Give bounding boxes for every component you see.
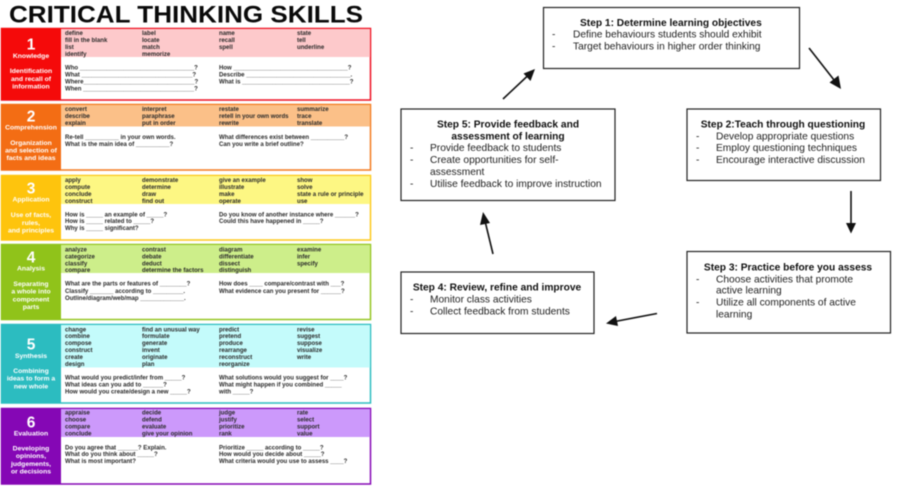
panel: 5 synthesis: revise [297,328,315,334]
panel: 4 analysis: debate [142,254,162,260]
step 2 box [687,109,880,180]
panel: 5 synthesis: formulate [142,334,170,340]
panel: 6 evaluation: judge [218,410,236,416]
panel: 4 analysis: categorize [65,254,96,260]
panel: 1 knowledge: and recall of [11,76,52,83]
panel: 1 knowledge: Who __________________________________? [65,66,198,72]
panel: 1 knowledge: underline [297,45,325,51]
step 3 box [687,252,890,333]
step 5 box: assessment [430,167,485,178]
panel: 6 evaluation: or decisions [11,468,51,476]
step 2 box: Employ questioning techniques [716,143,857,154]
panel: 3 application: draw [142,192,156,198]
panel: 4 analysis: contrast [142,248,166,254]
panel: 4 analysis: differentiate [219,254,254,260]
panel: 2 comprehension: summarize [297,107,329,113]
step 5 box: - [410,155,413,166]
step 2 box: Develop appropriate questions [716,132,854,142]
panel: 4 analysis: a whole into [11,288,51,296]
panel: 1 knowledge: match [142,45,160,51]
panel: 4 analysis: infer [297,254,311,260]
step 3 box: Utilize all components of active [716,298,856,308]
step 1 box: - [552,30,555,40]
panel: 4 analysis: determine the factors [142,268,204,274]
panel: 3 application: How is _____ an example of _____? [65,212,167,218]
panel: 2 comprehension: facts and ideas [6,155,56,162]
panel: 5 synthesis: rearrange [219,348,248,354]
panel: 4 analysis: Separating [13,281,49,288]
panel: 3 application: solve [297,185,313,191]
panel: 2 comprehension: restate [219,107,239,113]
panel: 1 knowledge: Identification [10,68,52,75]
panel: 2 comprehension: 2 [27,108,35,126]
panel: 6 evaluation: compare [65,424,91,430]
panel: 3 application: Do you know of another instance where ______? [219,212,359,218]
panel: 1 knowledge: 1 [27,36,36,54]
panel: 6 evaluation [1,408,370,484]
panel: 5 synthesis: Combining [13,368,49,375]
step 5 box: Step 5: Provide feedback and [437,120,579,130]
step 1 box [544,8,800,68]
panel: 2 comprehension: put in order [142,121,176,127]
arrow: step 2 to step 3 [846,191,856,234]
panel: 4 analysis [1,244,370,320]
step 5 box: Utilise feedback to improve instruction [430,179,602,190]
panel: 2 comprehension: trace [297,114,312,120]
panel: 1 knowledge: define [65,31,83,37]
step 3 box: Choose activities that promote [716,274,853,286]
panel: 3 application: rules, [22,220,40,227]
panel: 3 application: use [297,199,308,205]
panel: 5 synthesis: originate [142,355,168,361]
panel: 2 comprehension: and selection of [5,148,58,154]
step 3 box: Step 3: Practice before you assess [704,262,872,274]
panel: 3 application: How is _____ related to _____? [65,219,154,225]
panel: 1 knowledge: What is ________________________________? [219,80,354,86]
panel: 4 analysis: analyze [65,248,87,254]
panel: 6 evaluation: What criteria would you use to assess ____? [219,459,348,465]
panel: 5 synthesis: What solutions would you suggest for ____? [219,376,348,382]
arrow: step 1 to step 2 [809,48,841,89]
panel: 6 evaluation: appraise [65,410,91,416]
panel: 5 synthesis: invent [142,348,160,354]
panel: 2 comprehension: paraphrase [142,114,175,120]
step 4 box: - [410,294,413,306]
panel: 3 application: Application [12,196,50,204]
panel: 3 application: and principles [8,228,54,234]
arrow: step 3 to step 4 [606,314,657,326]
panel: 5 synthesis: write [296,355,312,361]
panel: 3 application: give an example [219,178,266,184]
panel: 1 knowledge: Describe _______________________________. [219,72,352,78]
panel: 1 knowledge: identify [65,52,87,58]
panel: 5 synthesis: ideas to form a [7,376,55,382]
panel: 3 application: demonstrate [142,178,179,184]
step 1 box: Step 1: Determine learning objectives [580,18,762,29]
panel: 1 knowledge: fill in the blank [65,38,108,44]
step 4 box: - [410,306,413,318]
panel: 6 evaluation: choose [65,418,87,424]
panel: 4 analysis: diagram [219,248,243,254]
panel: 6 evaluation: How would you decide about _____? [219,452,325,458]
panel: 6 evaluation: 6 [27,414,36,432]
panel: 2 comprehension: What is the main idea of __________? [65,142,174,148]
panel: 3 application: compute [65,185,91,191]
step 1 box: Target behaviours in higher order thinking [573,42,761,52]
step 2 box: Encourage interactive discussion [716,155,865,166]
panel: 4 analysis: distinguish [219,268,252,274]
panel: 5 synthesis: new whole [14,384,48,390]
step 5 box: assessment of learning [451,132,565,142]
panel: 4 analysis: specify [297,262,318,268]
panel: 4 analysis: What evidence can you present for ______? [219,289,345,295]
panel: 6 evaluation: What is most important? [65,459,136,465]
panel: 6 evaluation: evaluate [142,424,167,430]
panel: 3 application: operate [219,199,241,205]
step 4 box: Step 4: Review, refine and improve [413,282,581,294]
panel: 6 evaluation: support [297,424,320,430]
panel: 4 analysis: parts [23,304,40,311]
step 3 box: learning [716,310,753,320]
step 4 box [401,272,594,334]
panel: 5 synthesis: visualize [297,348,323,354]
panel: 4 analysis: examine [297,248,322,254]
panel: 4 analysis: deduct [142,262,162,268]
panel: 3 application: show [297,178,313,184]
panel: 1 knowledge: tell [297,38,306,44]
panel: 6 evaluation: decide [142,410,162,416]
panel: 6 evaluation: Prioritize _____ according to _____? [219,446,324,452]
panel: 1 knowledge: label [142,31,156,37]
panel: 3 application: conclude [65,192,92,198]
panel: 4 analysis: What are the parts or features of ________? [65,282,191,288]
panel: 5 synthesis: create [65,355,83,361]
panel: 2 comprehension: describe [65,114,91,120]
panel: 3 application: find out [142,199,164,205]
panel: 4 analysis: compare [65,268,91,274]
panel: 3 application: Use of facts, [11,212,51,219]
panel: 2 comprehension: Can you write a brief outline? [219,142,304,148]
arrow: step 4 to step 5 [480,212,493,254]
panel: 5 synthesis: change [65,328,87,334]
step 1 box: Define behaviours students should exhibit [573,30,762,40]
panel: 2 comprehension [1,104,370,170]
panel: 1 knowledge: locate [142,38,160,44]
panel: 4 analysis: Classify _______ according to _________. [65,289,185,295]
step 5 box: Provide feedback to students [430,143,561,154]
step 4 box: Collect feedback from students [430,306,570,318]
panel: 1 knowledge: spell [219,45,233,51]
panel: 2 comprehension: convert [65,107,87,113]
panel: 6 evaluation: opinions, [16,453,46,460]
panel: 3 application [1,175,370,240]
panel: 2 comprehension: interpret [142,107,167,113]
panel: 6 evaluation: value [297,432,313,438]
panel: 6 evaluation: Do you agree that ______? Explain. [65,446,167,452]
panel: 6 evaluation: give your opinion [142,432,193,438]
panel: 3 application: state a rule or principle [297,192,364,198]
panel: 6 evaluation: defend [142,418,162,424]
panel: 5 synthesis: combine [65,334,91,340]
panel: 5 synthesis: Synthesis [15,353,47,360]
panel: 6 evaluation: rate [297,410,309,416]
panel: 5 synthesis: suggest [297,334,320,340]
panel: 2 comprehension: Re-tell __________ in your own words. [65,135,176,141]
panel: 5 synthesis: suppose [297,341,323,347]
panel: 2 comprehension: retell in your own words [219,114,289,120]
panel: 3 application: illustrate [219,185,245,191]
panel: 5 synthesis: plan [142,362,155,368]
panel: 1 knowledge: Where_________________________________? [65,80,198,86]
arrow: step 5 to step 1 [503,69,535,99]
panel: 1 knowledge: How __________________________________? [219,66,352,72]
panel: 4 analysis: 4 [27,250,36,266]
panel: 2 comprehension: rewrite [219,121,239,127]
panel: 6 evaluation: conclude [65,432,92,438]
panel: 3 application: apply [65,178,81,184]
panel: 4 analysis: dissect [219,262,240,268]
panel: 5 synthesis: reorganize [219,362,250,368]
panel: 5 synthesis: predict [219,328,239,334]
step 1 box: - [552,42,555,52]
panel: 3 application: Could this have happened in _____? [219,219,324,225]
panel: 4 analysis: Analysis [17,266,45,272]
step 5 box: - [410,143,413,154]
panel: 5 synthesis: How would you create/design a new _____? [65,390,191,396]
panel: 5 synthesis: compose [65,341,92,347]
step 3 box: - [696,298,699,308]
panel: 2 comprehension: What differences exist between __________? [219,135,348,141]
panel: 5 synthesis: What might happen if you combined _____ [219,382,342,388]
step 2 box: Step 2:Teach through questioning [701,120,865,130]
panel: 6 evaluation: judgements, [10,461,51,468]
panel: 5 synthesis: 5 [27,336,36,354]
panel: 5 synthesis: construct [65,348,93,354]
title: CRITICAL THINKING SKILLS [9,2,363,28]
panel: 6 evaluation: Evaluation [14,430,48,438]
panel: 1 knowledge: name [219,31,235,37]
panel: 1 knowledge: recall [219,38,235,44]
panel: 6 evaluation: rank [219,432,232,438]
panel: 6 evaluation: justify [218,418,237,424]
panel: 1 knowledge: What _________________________________? [65,72,196,78]
step 5 box: Create opportunities for self- [430,155,559,166]
step 2 box: - [696,143,699,154]
panel: 3 application: determine [142,185,172,191]
step 2 box: - [696,155,699,166]
step 3 box: active learning [716,286,782,296]
panel: 2 comprehension: explain [65,121,86,127]
panel: 2 comprehension: Organization [10,140,52,147]
panel: 5 synthesis: pretend [219,334,241,340]
panel: 1 knowledge: state [297,31,312,37]
step 2 box: - [696,132,699,142]
panel: 1 knowledge: When _________________________________? [65,86,198,92]
panel: 5 synthesis: design [65,362,85,368]
panel: 4 analysis: classify [65,262,88,268]
panel: 6 evaluation: Developing [13,446,49,452]
panel: 5 synthesis: What would you predict/infer from _____? [65,376,186,382]
step 5 box: - [410,179,413,190]
panel: 1 knowledge: list [65,45,74,51]
panel: 3 application: 3 [27,180,36,198]
panel: 1 knowledge: Knowledge [13,53,49,60]
panel: 5 synthesis: with _____? [218,390,254,396]
panel: 2 comprehension: Comprehension [5,124,57,132]
panel: 4 analysis: How does ____ compare/contrast with ___? [219,282,345,288]
panel: 5 synthesis: generate [142,341,168,347]
panel: 5 synthesis: What ideas can you add to ______? [65,382,167,388]
panel: 2 comprehension: translate [297,121,323,127]
panel: 1 knowledge: memorize [142,52,171,58]
panel: 5 synthesis: find an unusual way [142,328,200,334]
panel: 3 application: Why is _____ significant? [65,226,139,232]
panel: 5 synthesis: produce [219,341,243,347]
panel: 6 evaluation: What do you think about _____? [65,452,158,458]
panel: 4 analysis: component [13,296,50,304]
panel: 3 application: make [219,192,235,198]
panel: 1 knowledge [1,28,370,100]
step 5 box [401,109,615,200]
panel: 4 analysis: Outline/diagram/web/map _____________. [65,296,186,302]
panel: 3 application: construct [65,199,93,205]
step 4 box: Monitor class activities [430,294,532,306]
panel: 6 evaluation: prioritize [219,424,245,430]
panel: 1 knowledge: information [12,84,50,90]
panel: 5 synthesis [1,324,370,404]
step 3 box: - [696,274,699,286]
panel: 6 evaluation: select [297,418,314,424]
panel: 5 synthesis: reconstruct [219,355,252,361]
